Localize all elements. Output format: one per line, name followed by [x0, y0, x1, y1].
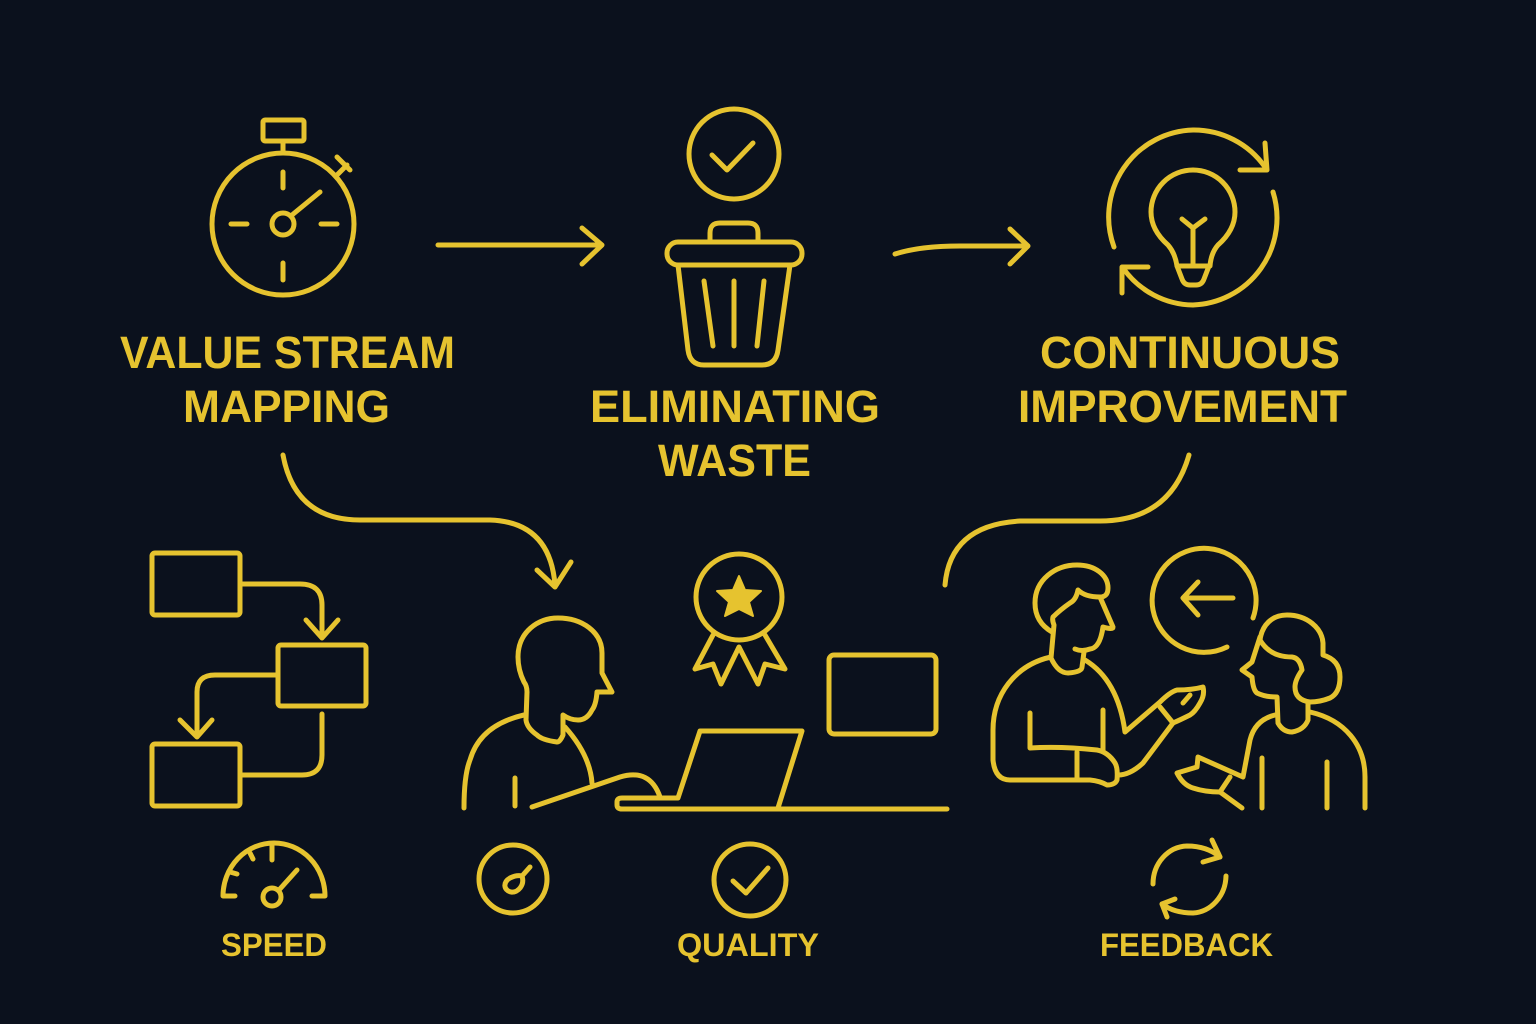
label: speed: SPEED: [221, 927, 327, 963]
icon: stopwatch: [212, 120, 354, 295]
heading: continuous improvement: [1018, 327, 1347, 432]
illustration: person at laptop: [464, 618, 947, 809]
arrow: value stream mapping to quality: [283, 455, 571, 587]
icon: circular back arrow: [1152, 548, 1256, 652]
heading: continuous improvement: CONTINUOUS: [1040, 327, 1340, 378]
illustration: two people giving feedback: [993, 548, 1365, 808]
arrow: stopwatch to trash: [438, 228, 602, 264]
icon: flowchart: [152, 553, 366, 806]
heading: value stream mapping: [120, 327, 455, 432]
connector: continuous improvement to feedback: [945, 455, 1189, 585]
icon: light bulb with cycle arrows: [1109, 130, 1277, 305]
icon: tablet: [829, 655, 936, 734]
icon: quality check circle: [714, 844, 786, 916]
icon: trash can: [667, 223, 802, 365]
label: feedback: FEEDBACK: [1100, 927, 1273, 963]
icon: small gauge: [479, 845, 547, 913]
icon: medal with star: [695, 554, 785, 684]
label: quality: QUALITY: [677, 927, 819, 963]
icon: check circle above trash: [689, 109, 779, 199]
heading: eliminating waste: ELIMINATING: [590, 381, 880, 432]
icon: speedometer: [223, 843, 325, 906]
heading: eliminating waste: WASTE: [658, 435, 811, 486]
heading: eliminating waste: [590, 381, 880, 486]
icon: feedback cycle arrows: [1153, 840, 1226, 917]
heading: value stream mapping: MAPPING: [183, 381, 390, 432]
heading: continuous improvement: IMPROVEMENT: [1018, 381, 1347, 432]
arrow: trash to bulb: [895, 229, 1028, 264]
heading: value stream mapping: VALUE STREAM: [120, 327, 455, 378]
